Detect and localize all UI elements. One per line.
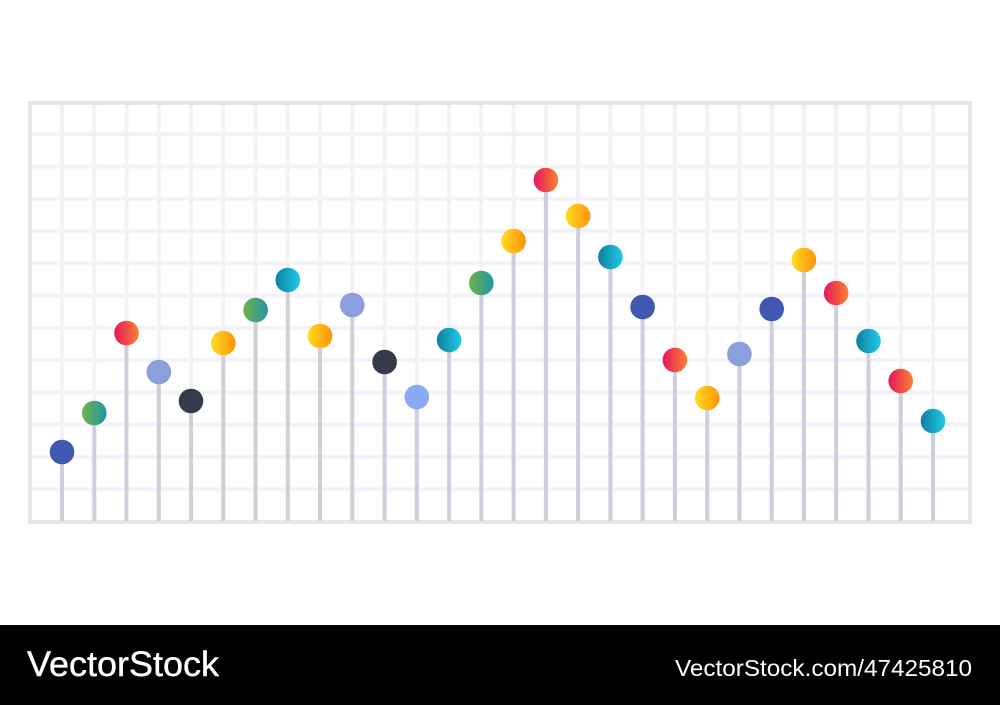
footer image id text: VectorStock.com/47425810 [675, 655, 972, 681]
footer logo text: VectorStock [27, 645, 220, 684]
footer bar [0, 625, 1000, 705]
chart grid [30, 103, 970, 522]
lollipop chart [50, 168, 945, 521]
